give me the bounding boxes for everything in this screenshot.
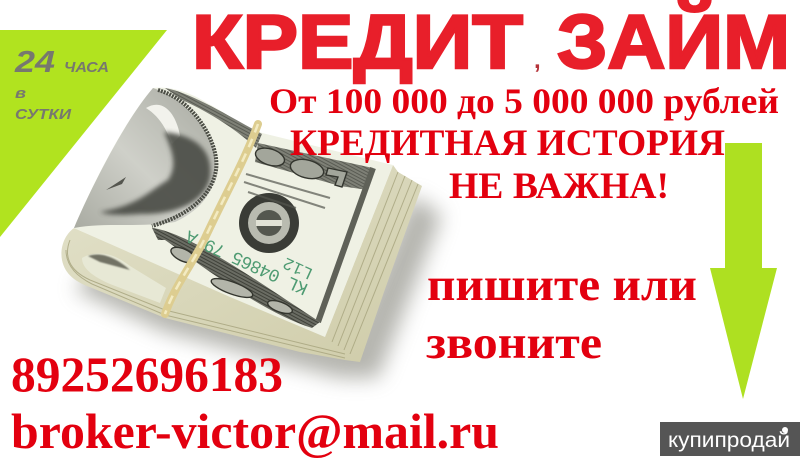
text: amount range: От 100 000 до 5 000 000 рублей	[269, 81, 779, 121]
badge text: 24	[14, 44, 55, 79]
inner roll	[82, 253, 166, 303]
text: credit history: КРЕДИТНАЯ ИСТОРИЯ	[290, 123, 725, 164]
title: ЗАЙМ	[557, 0, 790, 85]
series code: L12	[281, 252, 316, 282]
badge text	[14, 44, 109, 123]
portrait engraving	[74, 88, 215, 228]
front bill	[74, 88, 393, 337]
upper engraved strip	[165, 88, 262, 148]
title: КРЕДИТ	[192, 0, 523, 85]
top 100 band	[255, 143, 373, 190]
badge text: СУТКИ	[15, 106, 72, 123]
text: write or call	[426, 259, 697, 369]
panel: 24 hours badge	[0, 30, 167, 237]
portrait hair	[100, 132, 211, 215]
badge text: ЧАСА	[64, 59, 109, 76]
treasury seal	[239, 193, 299, 253]
green corner triangle	[0, 30, 167, 237]
bottom engraved band	[152, 228, 320, 328]
watermark badge: купипродай	[668, 429, 790, 452]
text: write or call: звоните	[426, 317, 602, 369]
rubber band	[165, 124, 258, 314]
title: ,	[534, 47, 541, 74]
text: not important: НЕ ВАЖНА!	[449, 166, 669, 207]
shadow	[75, 195, 442, 378]
watermark badge	[660, 422, 800, 456]
serial number: KL 04865 79 A	[183, 225, 311, 298]
title	[192, 0, 790, 85]
bottom ornament	[169, 244, 294, 316]
paper stack	[61, 165, 422, 362]
right bill border	[318, 168, 373, 322]
small print	[244, 174, 330, 208]
portrait turban light	[146, 105, 180, 144]
text: write or call: пишите или	[427, 259, 697, 311]
badge text: в	[15, 85, 26, 102]
stack edge lines	[66, 172, 418, 358]
photo: bundle of dollars with rubber band	[61, 88, 442, 378]
portrait eye	[106, 177, 126, 190]
portrait oval frame	[152, 90, 216, 226]
arrow: down	[710, 143, 777, 399]
contact: phone: 89252696183	[11, 346, 283, 402]
numerals 100	[253, 145, 347, 187]
contact: email: broker-victor@mail.ru	[11, 403, 499, 459]
